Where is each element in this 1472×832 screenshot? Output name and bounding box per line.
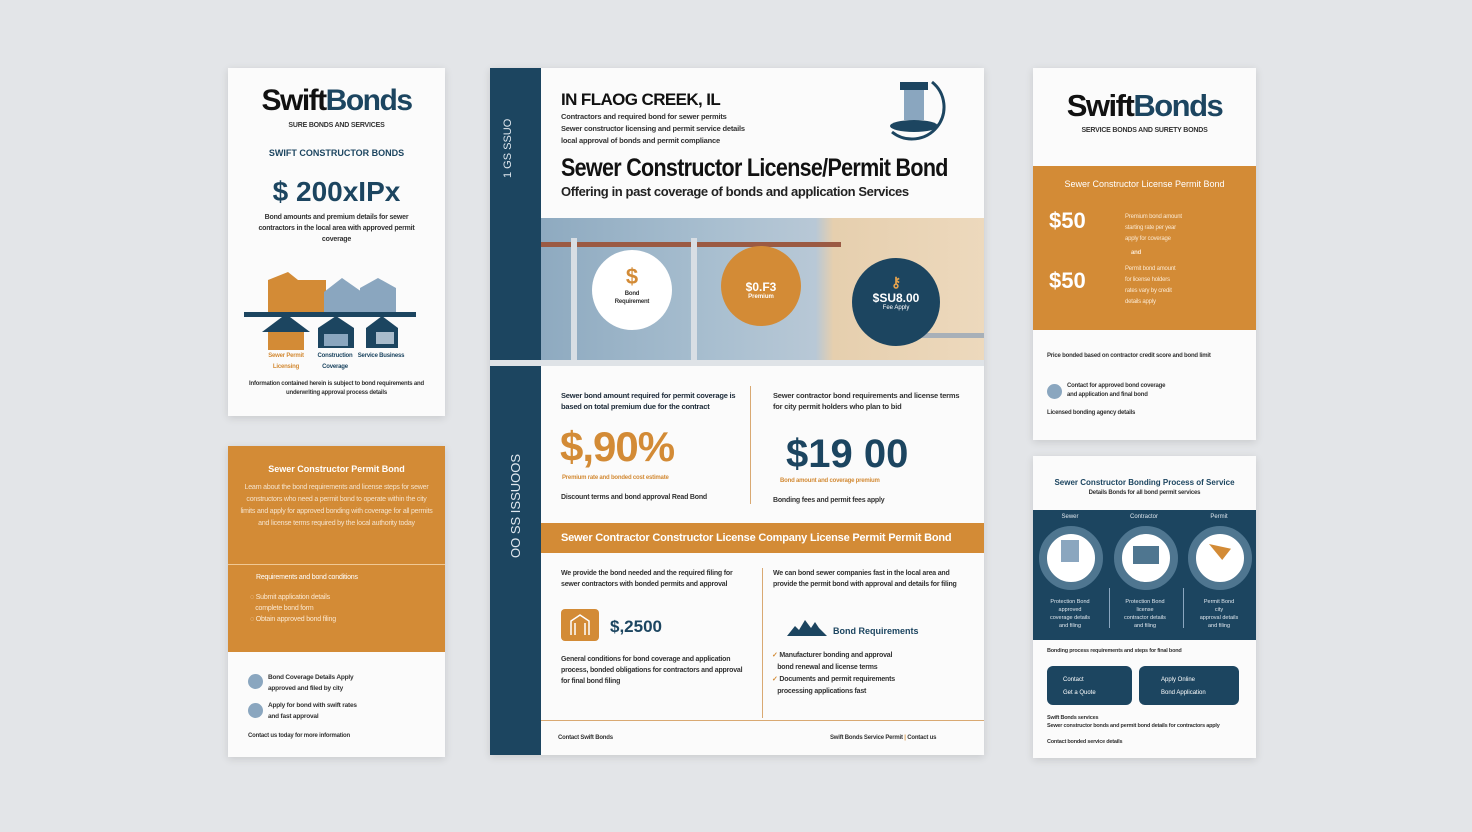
spine text top: 1 GS SSUO: [502, 119, 514, 178]
navy band: contractor details: [1124, 615, 1166, 621]
card: left bottom: complete bond form: [255, 605, 314, 612]
stat right: Sewer contractor bond requirements and license terms for city permit holders who plan to bid: [773, 391, 959, 411]
lower right text: We can bond sewer companies fast in the local area and provide the permit bond with approval and details for filing: [773, 570, 957, 588]
card: center: [490, 68, 984, 755]
card: right bottom: Details Bonds for all bond permit services: [1089, 490, 1200, 496]
card: left top: Service Business: [358, 353, 404, 359]
intro text: Sewer constructor licensing and permit service details: [561, 124, 745, 133]
orange panel: apply for coverage: [1125, 236, 1171, 242]
card: left top: [228, 68, 445, 416]
card: right top: [1033, 68, 1256, 440]
navy band: approval details: [1200, 615, 1238, 621]
card: center: Bond amount and coverage premium: [780, 478, 880, 484]
checklist: [772, 652, 895, 695]
orange band: [541, 523, 984, 553]
orange header: [228, 446, 445, 652]
navy band: license: [1136, 607, 1154, 613]
card: center: Bond Requirements: [833, 626, 919, 636]
orange panel: details apply: [1125, 299, 1156, 305]
card: center: Bonding fees and permit fees apply: [773, 497, 884, 504]
location heading: IN FLAOG CREEK, IL: [561, 90, 720, 109]
circle: orange: $0.F3: [746, 280, 776, 294]
footer: Contact Swift Bonds: [558, 735, 613, 741]
card: center: $,90%: [560, 423, 674, 470]
price 1: $50: [1049, 208, 1086, 233]
card: left bottom: Contact us today for more information: [248, 733, 350, 739]
intro text: [561, 112, 745, 145]
card: center: Premium rate and bonded cost estimate: [562, 475, 669, 481]
orange panel: for license holders: [1125, 277, 1170, 283]
labels: Sewer Permit Licensing: [268, 353, 304, 370]
lower left text: We provide the bond needed and the required filing for sewer contractors with bonded permits and approval: [561, 570, 732, 588]
card: left bottom: approved and filed by city: [268, 685, 343, 692]
icon: ring: [890, 80, 946, 140]
orange panel: and: [1131, 250, 1141, 256]
card: left bottom: ◌ Submit application details: [250, 594, 330, 601]
card: left bottom: and fast approval: [268, 713, 318, 720]
orange panel: [1033, 166, 1256, 330]
circle: white: Bond: [625, 291, 639, 297]
text: Price bonded based on contractor credit score and bond limit: [1047, 353, 1211, 359]
circle: orange: [721, 246, 801, 326]
logo: SwiftBonds: [262, 84, 412, 117]
card: left bottom: Bond Coverage Details Apply: [268, 674, 353, 681]
buttons: Contact: [1063, 677, 1084, 683]
icon: crown: [787, 620, 827, 636]
price: $,2500: [610, 617, 662, 636]
checklist: ✓ Documents and permit requirements: [772, 676, 895, 683]
circle: white: [592, 250, 672, 330]
spine text bottom: OO SS ISSUOOS: [508, 454, 523, 558]
bullets: [248, 674, 263, 689]
navy band: Protection Bond: [1050, 599, 1090, 605]
circle: navy: Fee Apply: [883, 305, 909, 311]
card: right bottom: [1033, 456, 1256, 758]
heading: Sewer Constructor Bonding Process of Service: [1054, 478, 1235, 487]
subtitle: Offering in past coverage of bonds and application Services: [561, 184, 909, 199]
orange panel: Sewer Constructor License Permit Bond: [1064, 179, 1225, 189]
card: center: Discount terms and bond approval Read Bond: [561, 494, 707, 501]
logo: SwiftBonds: [1067, 88, 1222, 123]
orange panel: rates vary by credit: [1125, 288, 1172, 294]
icon: orange box: [561, 609, 599, 641]
circle: white: $: [626, 264, 638, 289]
price: $ 200xIPx: [273, 176, 400, 207]
card: center: Swift Bonds Service Permit | Contact us: [830, 735, 936, 741]
circle: white: Requirement: [615, 299, 649, 305]
icon circles: [1039, 526, 1103, 590]
card: right bottom: Apply Online: [1161, 677, 1195, 683]
navy band: Permit: [1210, 514, 1228, 520]
navy band: and filing: [1134, 623, 1156, 629]
buttons: Get a Quote: [1063, 690, 1096, 696]
circle: orange: Premium: [748, 294, 774, 300]
circle: navy: [852, 258, 940, 346]
card: right bottom: Contact bonded service details: [1047, 739, 1122, 745]
orange band: Sewer Contractor Constructor License Company License Permit Permit Bond: [561, 532, 951, 544]
circle: navy: ⚷: [891, 274, 901, 290]
card: left bottom: Apply for bond with swift rates: [268, 702, 357, 709]
card: right top: and application and final bond: [1067, 392, 1148, 398]
card: right top: Contact for approved bond coverage: [1067, 383, 1165, 389]
price 2: $50: [1049, 268, 1086, 293]
card: right bottom: Swift Bonds services: [1047, 715, 1098, 721]
navy band: Contractor: [1130, 514, 1158, 520]
card: left top: Construction Coverage: [318, 353, 352, 370]
list: Requirements and bond conditions: [256, 574, 358, 581]
card: right bottom: Bonding process requirements and steps for final bond: [1047, 648, 1182, 654]
card: left bottom: [228, 446, 445, 757]
illustration: houses: [244, 272, 416, 350]
checklist: ✓ Manufacturer bonding and approval: [772, 652, 892, 659]
lower left text 2: General conditions for bond coverage and application process, bonded obligations for contractors and approval for final bond filing: [561, 656, 742, 685]
orange panel: starting rate per year: [1125, 225, 1176, 231]
navy band: Protection Bond: [1125, 599, 1165, 605]
card: center: $19 00: [786, 432, 908, 476]
orange panel: Premium bond amount: [1125, 214, 1182, 220]
navy band: city: [1215, 607, 1223, 613]
navy band: coverage details: [1050, 615, 1090, 621]
spine: [490, 68, 541, 755]
card: right top: SERVICE BONDS AND SURETY BONDS: [1081, 127, 1208, 134]
navy band: approved: [1059, 607, 1081, 613]
navy band: and filing: [1208, 623, 1230, 629]
card: right top: Licensed bonding agency details: [1047, 410, 1135, 416]
card: left bottom: ◌ Obtain approved bond filing: [250, 616, 336, 623]
orange panel: Permit bond amount: [1125, 266, 1175, 272]
subheading: SWIFT CONSTRUCTOR BONDS: [269, 148, 404, 158]
card: right bottom: Sewer constructor bonds and permit bond details for contractors apply: [1047, 723, 1220, 729]
stat left: Sewer bond amount required for permit coverage is based on total premium due for the contract: [561, 391, 735, 411]
navy band: and filing: [1059, 623, 1081, 629]
card: left bottom: Sewer Constructor Permit Bond: [268, 464, 405, 474]
card: right bottom: Bond Application: [1161, 690, 1206, 696]
title: Sewer Constructor License/Permit Bond: [561, 154, 948, 182]
navy band: Sewer: [1061, 514, 1078, 520]
tagline: SURE BONDS AND SERVICES: [288, 122, 385, 129]
checklist: bond renewal and license terms: [777, 664, 877, 671]
buttons: [1047, 666, 1132, 705]
circle: navy: $SU8.00: [873, 291, 919, 305]
navy band: [1033, 510, 1256, 640]
footer text: Information contained herein is subject to bond requirements and underwriting approval process details: [249, 381, 424, 396]
intro text: local approval of bonds and permit compliance: [561, 136, 720, 145]
photo panel: [541, 218, 984, 360]
text block: Bond amounts and premium details for sewer contractors in the local area with approved permit coverage: [258, 214, 415, 243]
navy band: Permit Bond: [1204, 599, 1234, 605]
card: left bottom: Learn about the bond requirements and license steps for sewer constructors who need a permit bond to operate within the city limits and apply for approved bonding with coverage for all permits and license terms required by the local authority today: [240, 484, 433, 527]
checklist: processing applications fast: [777, 688, 866, 695]
intro text: Contractors and required bond for sewer permits: [561, 112, 727, 121]
